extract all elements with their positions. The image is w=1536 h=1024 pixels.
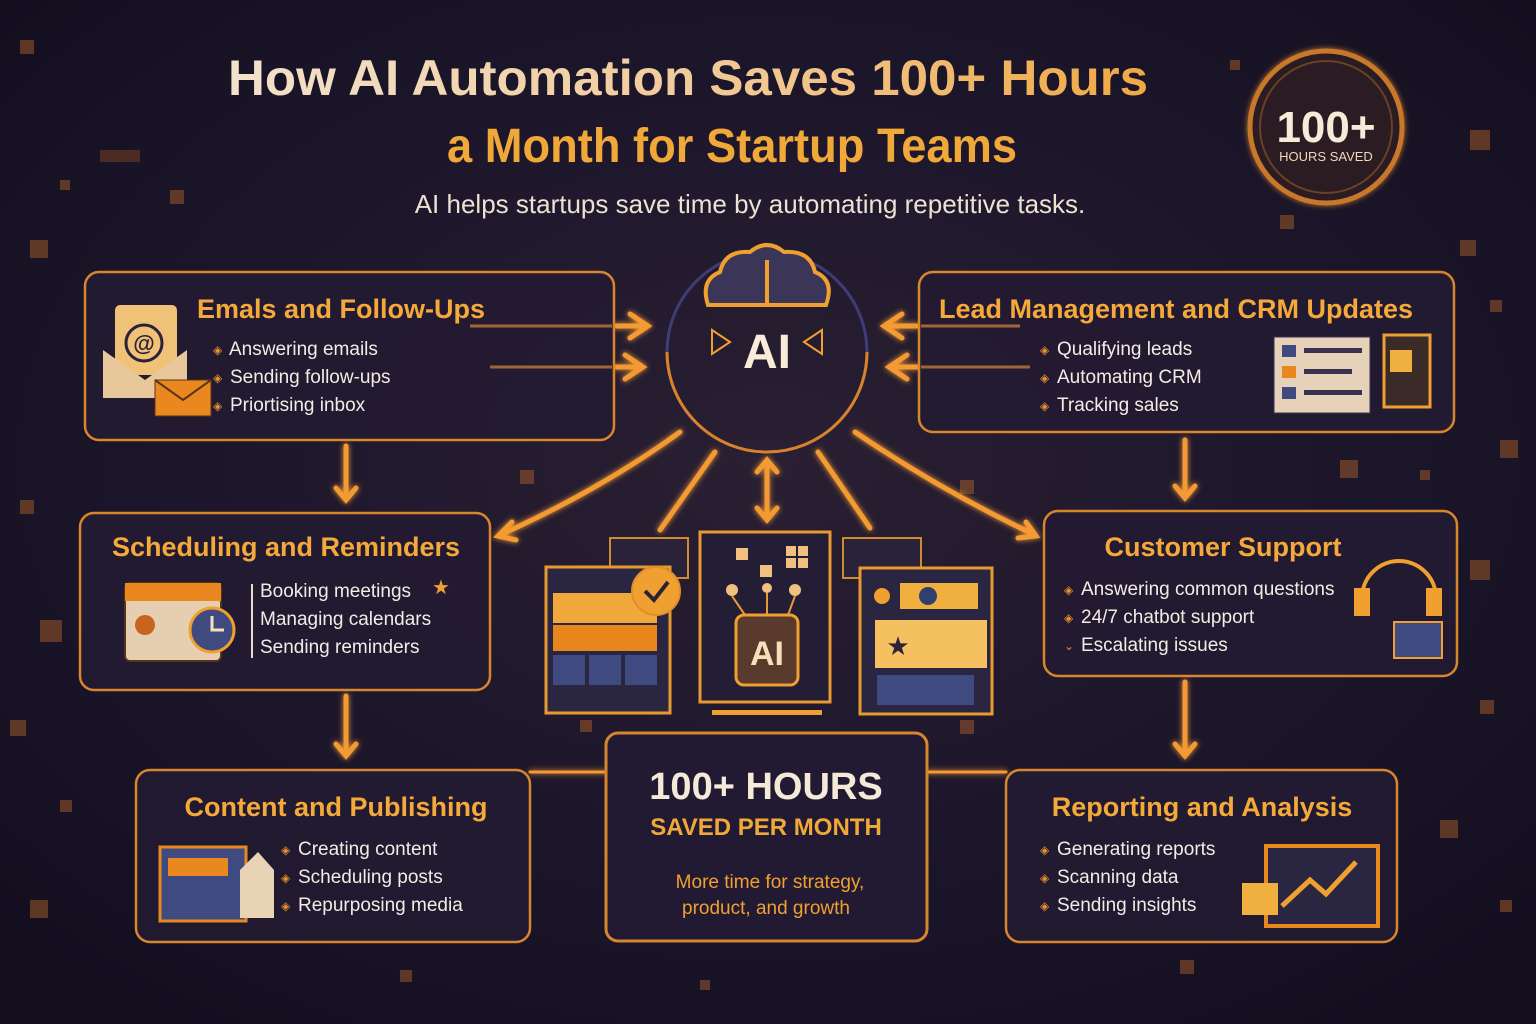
panel: emails: Sending follow-ups	[230, 367, 391, 388]
panel: reporting: Sending insights	[1057, 895, 1196, 916]
badge: 100+ hours saved	[1250, 51, 1402, 203]
panel: content: ◈	[281, 899, 291, 913]
title: a Month for Startup Teams	[447, 120, 1017, 173]
icon: AI brain hub	[667, 245, 867, 452]
icon: crm sheet	[1274, 335, 1430, 413]
panel: customer support: ◈	[1064, 611, 1074, 625]
panel: customer support	[1044, 511, 1457, 676]
panel: emails	[85, 272, 614, 440]
panel: reporting: ◈	[1040, 899, 1050, 913]
panel: emails: Answering emails	[229, 339, 378, 360]
badge: 100+ hours saved: 100+	[1276, 103, 1376, 152]
icon: envelope: @	[133, 331, 155, 356]
panel: scheduling: Booking meetings	[260, 581, 411, 602]
panel: lead management: Lead Management and CRM Updates	[939, 294, 1413, 324]
panel: reporting	[1006, 770, 1397, 942]
panel: scheduling: ★	[432, 577, 450, 599]
panel: emails: Priortising inbox	[230, 395, 366, 416]
panel: scheduling: Managing calendars	[260, 609, 431, 630]
panel: emails: ◈	[213, 399, 223, 413]
panel: content: Creating content	[298, 839, 438, 860]
icon: central dashboards: AI	[750, 635, 784, 673]
panel: lead management: ◈	[1040, 371, 1050, 385]
panel: content: Repurposing media	[298, 895, 463, 916]
panel: customer support: Answering common questions	[1081, 579, 1334, 600]
panel: customer support: ◈	[1064, 583, 1074, 597]
panel: customer support: Escalating issues	[1081, 635, 1228, 656]
panel: reporting: Reporting and Analysis	[1052, 792, 1352, 822]
panel: reporting: Scanning data	[1057, 867, 1179, 888]
panel: lead management: Tracking sales	[1057, 395, 1179, 416]
badge: 100+ hours saved: HOURS SAVED	[1279, 149, 1373, 164]
panel: emails: ◈	[213, 371, 223, 385]
panel: content: ◈	[281, 871, 291, 885]
icon: documents	[160, 847, 274, 921]
icon: calendar	[125, 583, 234, 661]
panel: lead management: Qualifying leads	[1057, 339, 1192, 360]
icon: central dashboards: ★	[886, 631, 910, 661]
panel: scheduling: Sending reminders	[260, 637, 419, 658]
panel: content: ◈	[281, 843, 291, 857]
panel: reporting: Generating reports	[1057, 839, 1215, 860]
panel: lead management: ◈	[1040, 343, 1050, 357]
panel: content: Content and Publishing	[185, 792, 487, 822]
panel: customer support: ⌄	[1064, 639, 1074, 653]
subtitle: AI helps startups save time by automating repetitive tasks.	[415, 189, 1085, 219]
panel: center summary: product, and growth	[682, 898, 850, 919]
icon: AI brain hub: AI	[743, 326, 791, 379]
panel: center summary: 100+ HOURS	[649, 766, 883, 808]
title: How AI Automation Saves 100+ Hours	[228, 50, 1148, 106]
panel: emails: Emals and Follow-Ups	[197, 294, 485, 324]
icon: chart	[1242, 846, 1378, 926]
icon: envelope	[103, 305, 211, 416]
panel: scheduling	[80, 513, 490, 690]
panel: customer support: 24/7 chatbot support	[1081, 607, 1255, 628]
panel: lead management: ◈	[1040, 399, 1050, 413]
arrows: connectors	[336, 314, 1195, 772]
panel: scheduling: Scheduling and Reminders	[112, 532, 460, 562]
panel: content: Scheduling posts	[298, 867, 443, 888]
panel: center summary: More time for strategy,	[676, 872, 864, 893]
panel: customer support: Customer Support	[1104, 532, 1342, 562]
title	[228, 50, 1148, 173]
panel: center summary	[606, 733, 927, 941]
panel: lead management	[919, 272, 1454, 432]
panel: content	[136, 770, 530, 942]
icon: central dashboards	[546, 532, 992, 715]
panel: center summary: SAVED PER MONTH	[650, 814, 882, 841]
panel: lead management: Automating CRM	[1057, 367, 1202, 388]
panel: emails: ◈	[213, 343, 223, 357]
panel: reporting: ◈	[1040, 871, 1050, 885]
icon: headset	[1356, 561, 1442, 658]
panel: reporting: ◈	[1040, 843, 1050, 857]
